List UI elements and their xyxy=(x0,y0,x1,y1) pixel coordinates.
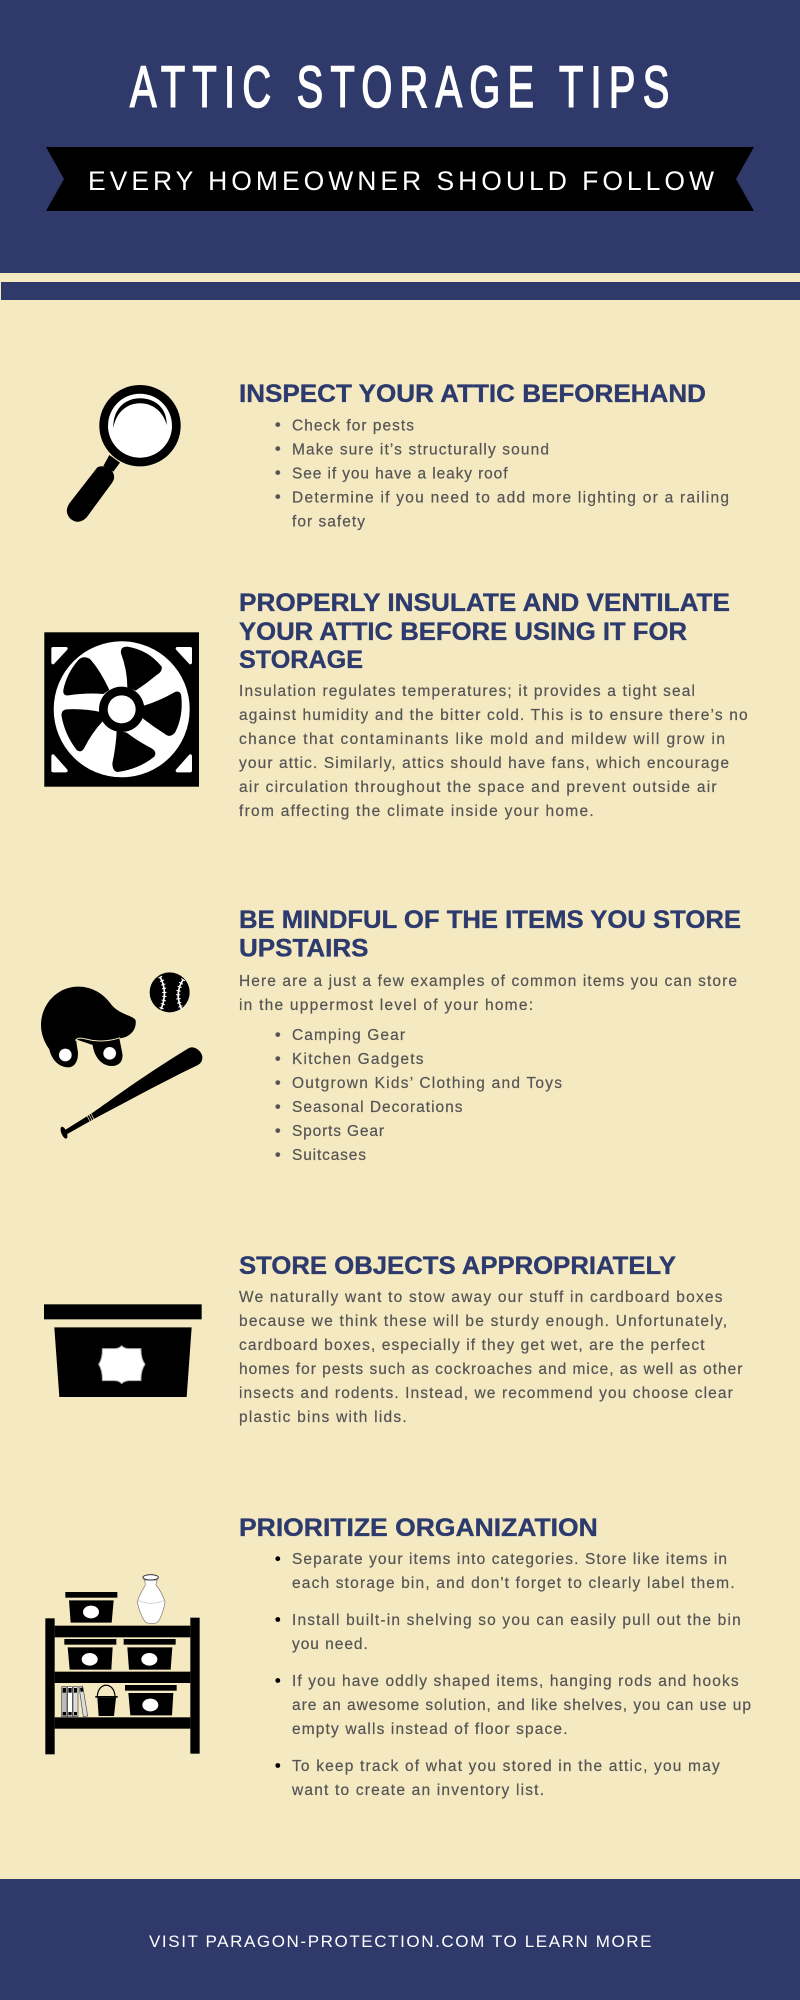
bullet list: Sports Gear xyxy=(292,1123,384,1140)
bullet list: Separate your items into categories. Store like items in xyxy=(292,1551,727,1568)
bullet list: Kitchen Gadgets xyxy=(292,1051,424,1068)
paragraph: insects and rodents. Instead, we recommend you choose clear xyxy=(239,1385,733,1402)
shelf frame xyxy=(45,1618,200,1754)
ribbon banner: EVERY HOMEOWNER SHOULD FOLLOW xyxy=(88,166,714,196)
bullet list: If you have oddly shaped items, hanging rods and hooks xyxy=(292,1673,739,1690)
heading: UPSTAIRS xyxy=(239,935,368,963)
icon: shelving unit with bins xyxy=(45,1575,200,1754)
bullet list: Seasonal Decorations xyxy=(292,1099,463,1116)
heading: PROPERLY INSULATE AND VENTILATE xyxy=(239,589,730,617)
bullet list: Install built-in shelving so you can easily pull out the bin xyxy=(292,1612,741,1629)
title: ATTIC STORAGE TIPS xyxy=(130,54,669,120)
bullet list: each storage bin, and don't forget to clearly label them. xyxy=(292,1575,734,1592)
books xyxy=(62,1686,88,1717)
bullet list: for safety xyxy=(292,514,365,530)
paragraph: cardboard boxes, especially if they get wet, are the perfect xyxy=(239,1337,705,1354)
bucket xyxy=(95,1685,118,1716)
panel: prioritize organization xyxy=(45,1514,751,1799)
bullet list: Suitcases xyxy=(292,1147,366,1164)
paragraph: chance that contaminants like mold and mildew will grow in xyxy=(239,731,725,748)
icon: baseball xyxy=(150,972,190,1012)
footer call to action: VISIT PARAGON-PROTECTION.COM TO LEARN MORE xyxy=(149,1932,652,1951)
icon: baseball helmet, ball and bat xyxy=(41,972,202,1140)
bullet list xyxy=(275,1551,751,1799)
header panel xyxy=(0,0,800,273)
icon: helmet xyxy=(41,987,136,1067)
heading: STORAGE xyxy=(239,646,363,674)
intro text xyxy=(239,973,737,1014)
header divider band xyxy=(1,282,800,300)
bullet list: To keep track of what you stored in the attic, you may xyxy=(292,1758,720,1775)
ribbon banner xyxy=(46,147,754,211)
icon: magnifying glass xyxy=(67,385,181,522)
heading: YOUR ATTIC BEFORE USING IT FOR xyxy=(239,618,687,646)
footer panel xyxy=(0,1879,800,2000)
panel: insulate and ventilate xyxy=(44,589,748,820)
paragraph xyxy=(239,683,748,820)
paragraph: plastic bins with lids. xyxy=(239,1409,407,1426)
heading: BE MINDFUL OF THE ITEMS YOU STORE xyxy=(239,906,741,934)
vase xyxy=(137,1575,165,1623)
heading: PRIORITIZE ORGANIZATION xyxy=(239,1514,598,1542)
bullet list: Outgrown Kids’ Clothing and Toys xyxy=(292,1075,562,1092)
icon: ventilation fan xyxy=(44,632,199,787)
bullet list: want to create an inventory list. xyxy=(291,1782,544,1799)
paragraph: homes for pests such as cockroaches and mice, as well as other xyxy=(239,1361,742,1378)
paragraph: against humidity and the bitter cold. This is to ensure there’s no xyxy=(239,707,748,724)
heading xyxy=(239,906,741,963)
paragraph: Insulation regulates temperatures; it provides a tight seal xyxy=(239,683,695,700)
bullet list xyxy=(275,418,729,530)
paragraph: air circulation throughout the space and prevent outside air xyxy=(239,779,717,796)
bullet list xyxy=(275,1027,562,1164)
paragraph: We naturally want to stow away our stuff in cardboard boxes xyxy=(239,1289,723,1306)
paragraph xyxy=(239,1289,742,1426)
heading: INSPECT YOUR ATTIC BEFOREHAND xyxy=(239,380,706,408)
paragraph: from affecting the climate inside your home. xyxy=(239,803,594,820)
panel: inspect your attic xyxy=(67,380,729,530)
panel: store objects appropriately xyxy=(44,1252,742,1426)
bullet list: empty walls instead of floor space. xyxy=(292,1721,568,1738)
icon: bat xyxy=(59,1047,202,1140)
bullet list: Camping Gear xyxy=(292,1027,405,1044)
panel: be mindful of items xyxy=(41,906,741,1164)
bullet list: Check for pests xyxy=(292,418,414,434)
paragraph: because we think these will be sturdy enough. Unfortunately, xyxy=(239,1313,727,1330)
heading: STORE OBJECTS APPROPRIATELY xyxy=(239,1252,676,1280)
icon: storage bin xyxy=(44,1304,202,1397)
bullet list: Determine if you need to add more lighting or a railing xyxy=(292,490,729,506)
bullet list: Make sure it’s structurally sound xyxy=(292,442,549,458)
bullet list: are an awesome solution, and like shelves, you can use up xyxy=(292,1697,751,1714)
bins xyxy=(64,1592,177,1715)
heading xyxy=(239,589,730,674)
bullet list: you need. xyxy=(292,1636,368,1653)
intro text: Here are a just a few examples of common items you can store xyxy=(239,973,737,990)
bullet list: See if you have a leaky roof xyxy=(292,466,508,482)
intro text: in the uppermost level of your home: xyxy=(239,997,533,1014)
paragraph: your attic. Similarly, attics should have fans, which encourage xyxy=(239,755,729,772)
